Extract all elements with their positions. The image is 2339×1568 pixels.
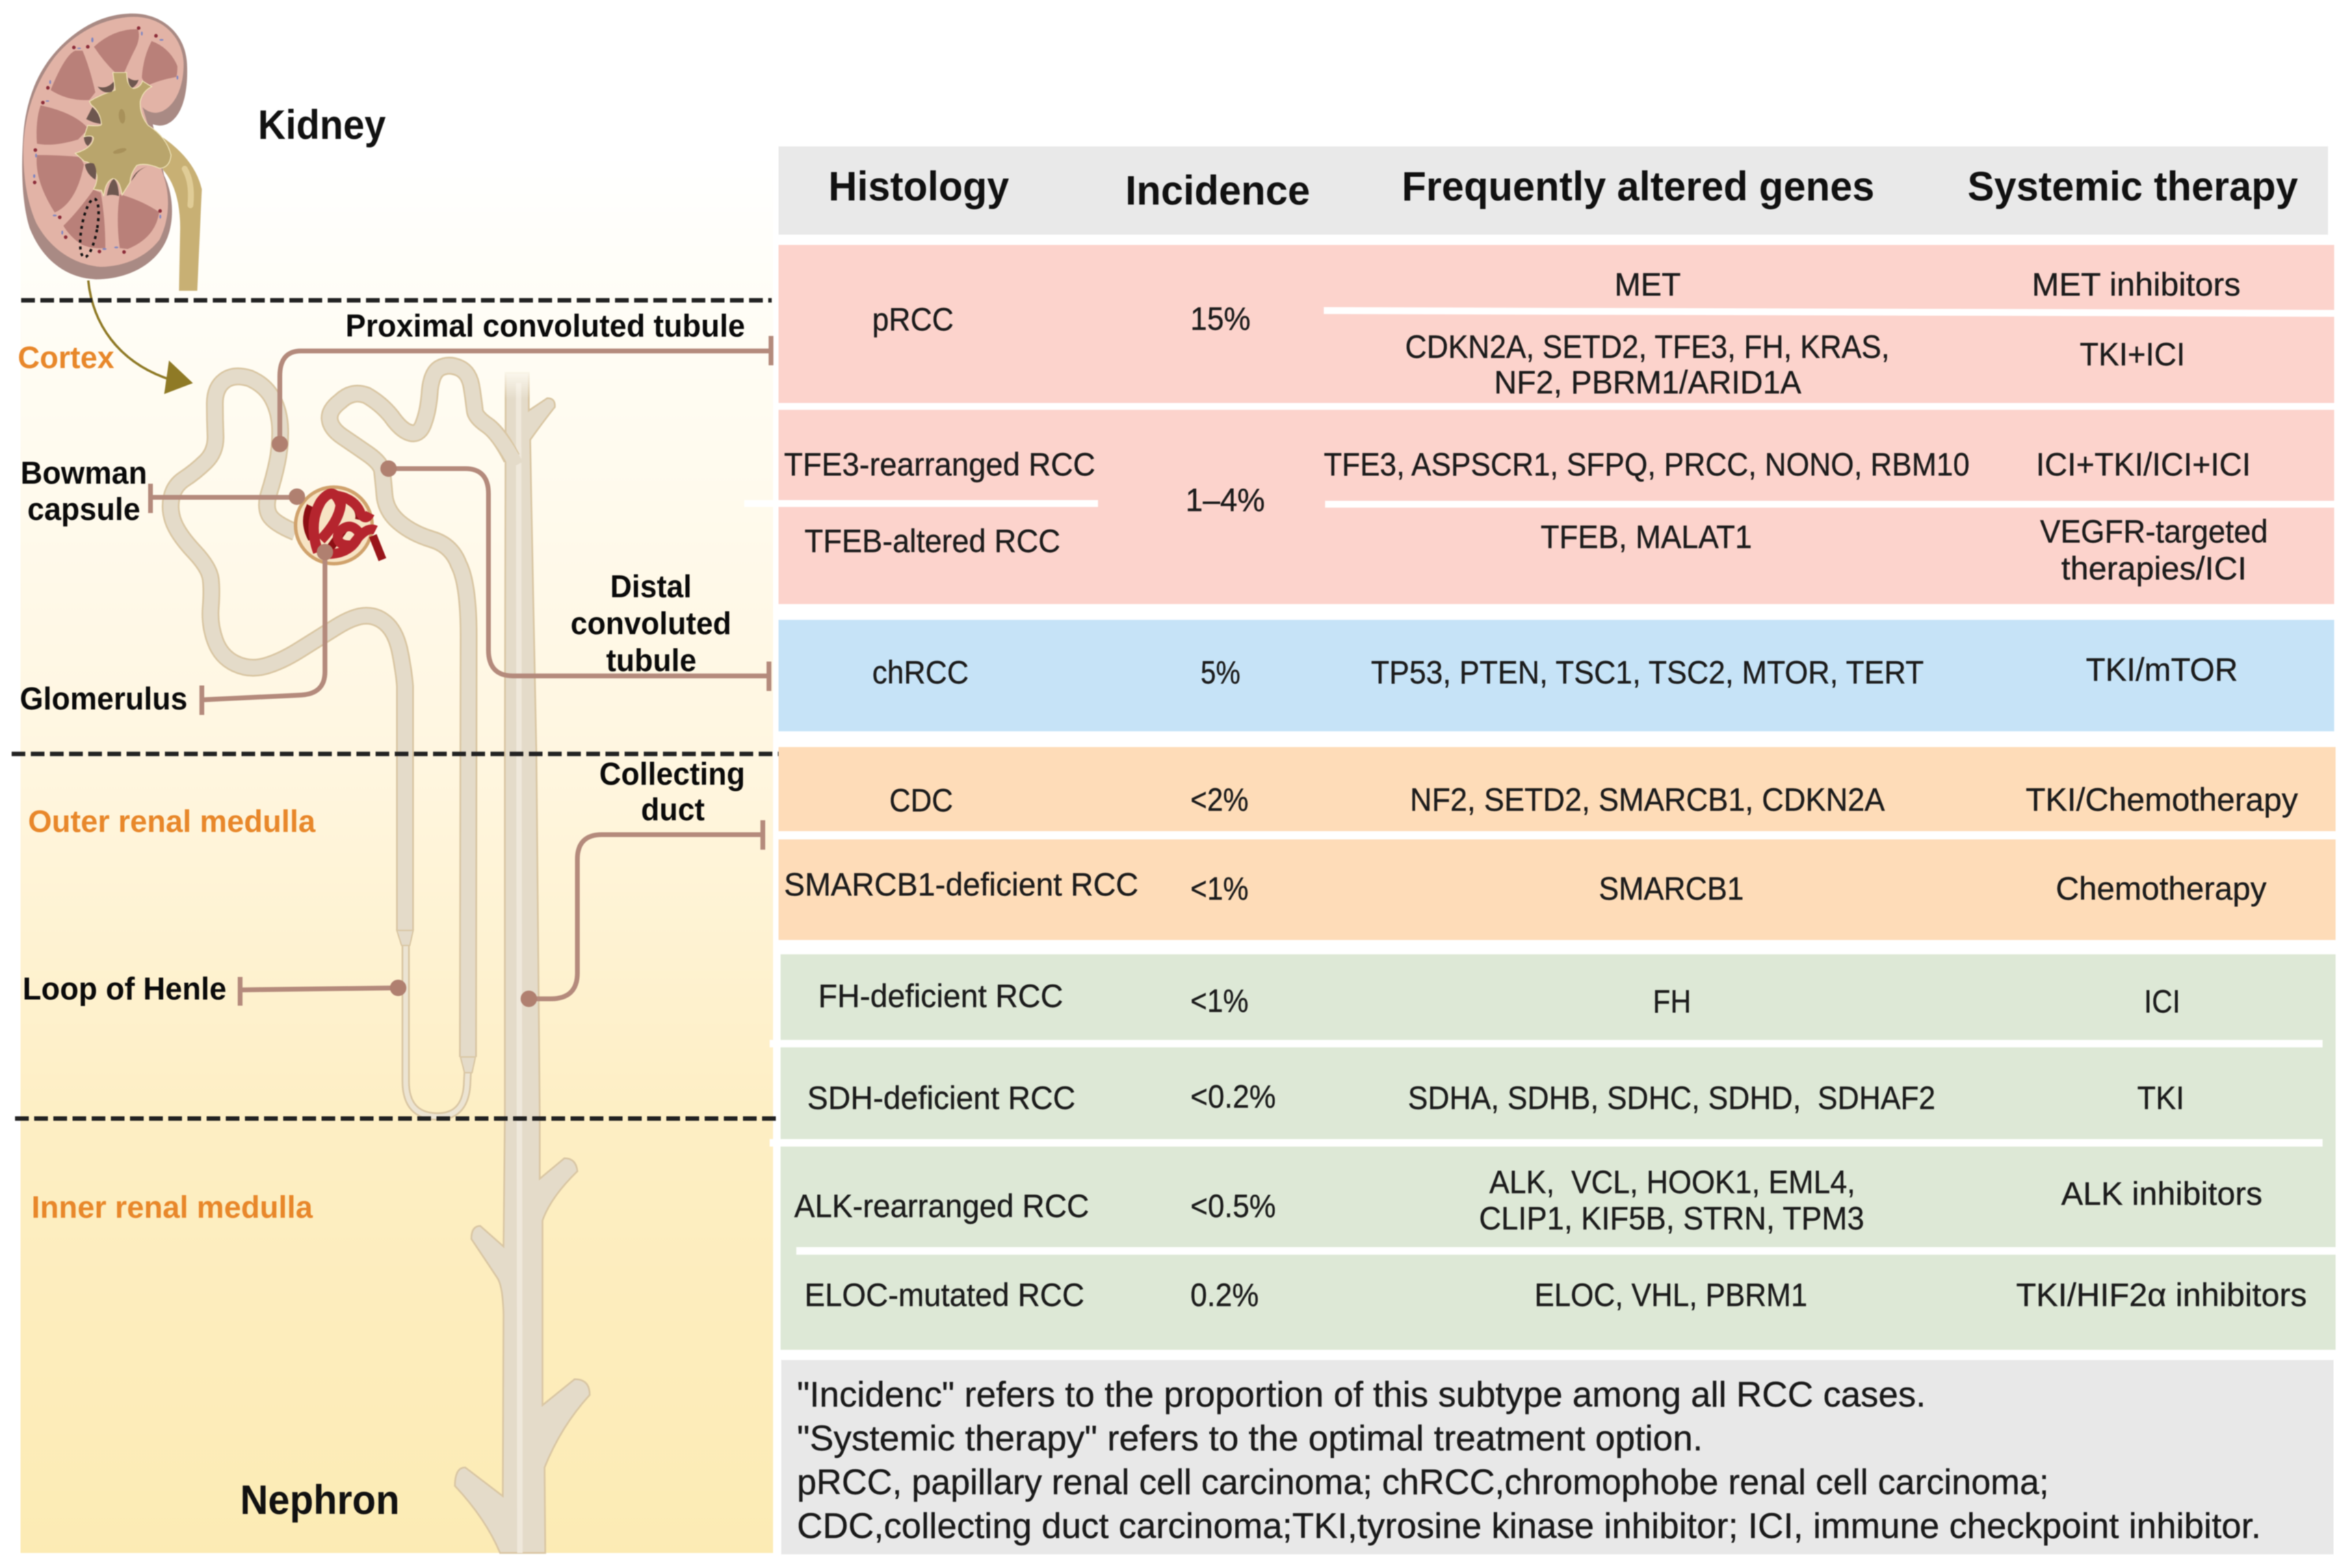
title: Nephron: Nephron xyxy=(240,1477,400,1523)
row: TFE3-rearranged RCC: ICI+TKI/ICI+ICI xyxy=(2036,446,2251,482)
label: cortex: Cortex xyxy=(18,340,114,375)
label: loop of Henle: Loop of Henle xyxy=(23,971,226,1006)
row: chRCC: chRCC xyxy=(872,654,969,690)
row: CDC: <2% xyxy=(1190,781,1249,818)
diagram: nephron xyxy=(170,365,590,1553)
labels: nephron structures and zones xyxy=(18,308,745,1523)
row: chRCC: TKI/mTOR xyxy=(2086,651,2238,688)
row: ELOC-mutated RCC: ELOC-mutated RCC xyxy=(805,1277,1084,1313)
icon: calyces xyxy=(84,77,149,196)
row: TFEB-altered RCC xyxy=(805,513,2268,586)
leader: glomerulus xyxy=(202,544,333,715)
label: collecting duct xyxy=(599,756,745,827)
row: chRCC: TP53, PTEN, TSC1, TSC2, MTOR, TERT xyxy=(1371,654,1924,690)
label: proximal convoluted tubule: Proximal convoluted tubule xyxy=(345,308,745,343)
row: SDH-deficient RCC: <0.2% xyxy=(1190,1078,1276,1114)
row: FH-deficient RCC: FH-deficient RCC xyxy=(818,978,1063,1014)
row: TFEB-altered RCC: therapies/ICI xyxy=(2061,550,2247,586)
label: distal convoluted tubule: convoluted xyxy=(571,605,731,641)
label: Bowman capsule: Bowman xyxy=(21,455,147,491)
row: TFE3-rearranged RCC: TFE3, ASPSCR1, SFPQ, PRCC, NONO, RBM10 xyxy=(1324,446,1970,482)
panel: nephron background xyxy=(21,147,773,1553)
icon: vessels dots xyxy=(33,26,179,254)
row: FH-deficient RCC xyxy=(818,978,2180,1019)
leader: distal convoluted tubule xyxy=(380,460,769,691)
row: ELOC-mutated RCC xyxy=(805,1277,2307,1313)
panel: footnote: CDC,collecting duct carcinoma;TKI,tyrosine kinase inhibitor; ICI, immune checkpoint inhibitor. xyxy=(797,1506,2261,1546)
icon: renal pelvis xyxy=(75,73,171,196)
panel: footnote xyxy=(781,1360,2334,1554)
header: Incidence: Incidence xyxy=(1125,168,1310,213)
row: ALK-rearranged RCC: <0.5% xyxy=(1190,1188,1276,1224)
row: TFEB-altered RCC: TFEB-altered RCC xyxy=(805,523,1060,559)
row: ELOC-mutated RCC: TKI/HIF2α inhibitors xyxy=(2016,1277,2307,1313)
row: pRCC: 15% xyxy=(1190,300,1251,337)
row: TFE3-rearranged RCC: TFE3-rearranged RCC xyxy=(784,446,1095,482)
label: distal convoluted tubule: tubule xyxy=(606,642,696,678)
row: pRCC: TKI+ICI xyxy=(2080,336,2185,372)
row: FH-deficient RCC: ICI xyxy=(2144,983,2180,1019)
label: collecting duct: Collecting xyxy=(599,756,745,792)
row: TFE3-rearranged RCC xyxy=(784,446,2251,482)
label: Bowman capsule: capsule xyxy=(27,491,140,527)
panel: blue row (chRCC) xyxy=(779,620,2334,731)
row: TFEB-altered RCC: TFEB, MALAT1 xyxy=(1541,519,1752,555)
header: Systemic therapy: Systemic therapy xyxy=(1968,164,2299,209)
row: chRCC xyxy=(872,651,2238,690)
row: SMARCB1-deficient RCC xyxy=(784,866,2266,906)
header: Histology: Histology xyxy=(828,164,1010,209)
row: SDH-deficient RCC xyxy=(807,1078,2184,1116)
distal tubule xyxy=(330,365,517,1073)
label: outer renal medulla: Outer renal medulla xyxy=(28,804,316,839)
row: pRCC: MET xyxy=(1615,266,1681,302)
row: chRCC: 5% xyxy=(1201,654,1240,690)
row: ALK-rearranged RCC: ALK, VCL, HOOK1, EML4, xyxy=(1489,1164,1855,1200)
label: Bowman capsule xyxy=(21,455,147,527)
row: ELOC-mutated RCC: 0.2% xyxy=(1190,1277,1259,1313)
row: SMARCB1-deficient RCC: <1% xyxy=(1190,870,1249,906)
leader: proximal convoluted tubule xyxy=(272,336,771,452)
cell: 1–4% incidence: 1–4% xyxy=(1186,482,1265,518)
proximal tubule and descending limb xyxy=(170,376,405,930)
row: SMARCB1-deficient RCC: SMARCB1 xyxy=(1599,870,1744,906)
header: Frequently altered genes: Frequently altered genes xyxy=(1402,164,1874,209)
row: CDC: TKI/Chemotherapy xyxy=(2026,781,2299,818)
row: CDC xyxy=(889,781,2299,818)
row: FH-deficient RCC: FH xyxy=(1653,983,1691,1019)
icon: renal pyramids xyxy=(36,29,177,249)
row: pRCC: NF2, PBRM1/ARID1A xyxy=(1494,364,1802,400)
label: distal convoluted tubule xyxy=(571,569,731,678)
row: pRCC: pRCC xyxy=(872,301,954,337)
row: ELOC-mutated RCC: ELOC, VHL, PBRM1 xyxy=(1534,1277,1807,1313)
label: collecting duct: duct xyxy=(641,792,705,827)
panel: footnote: pRCC, papillary renal cell carcinoma; chRCC,chromophobe renal cell carcinoma; xyxy=(797,1463,2049,1502)
arrow: kidney to nephron xyxy=(88,280,193,394)
panel: footnote: "Systemic therapy" refers to the optimal treatment option. xyxy=(797,1419,1703,1459)
row: SMARCB1-deficient RCC: Chemotherapy xyxy=(2056,870,2266,906)
label: distal convoluted tubule: Distal xyxy=(610,569,692,604)
row: ALK-rearranged RCC: ALK-rearranged RCC xyxy=(794,1188,1089,1224)
leader lines xyxy=(151,336,771,1007)
leader: Bowman capsule xyxy=(151,484,305,513)
row: CDC: NF2, SETD2, SMARCB1, CDKN2A xyxy=(1410,781,1885,818)
panel: green rows (FH, SDH, ALK, ELOC) xyxy=(770,954,2336,1350)
row: pRCC xyxy=(872,266,2240,400)
panel: pink rows (pRCC, TFE3, TFEB) xyxy=(744,245,2334,604)
thin loop of Henle xyxy=(397,930,468,1116)
row: SDH-deficient RCC: TKI xyxy=(2137,1080,2184,1116)
icon: ureter xyxy=(153,131,202,291)
glomerulus and Bowman capsule xyxy=(296,487,382,564)
label: glomerulus: Glomerulus xyxy=(20,681,187,716)
row: pRCC: CDKN2A, SETD2, TFE3, FH, KRAS, xyxy=(1405,328,1890,365)
row: pRCC: MET inhibitors xyxy=(2032,266,2240,302)
dashed zone boundaries xyxy=(12,300,784,1119)
collecting duct xyxy=(455,368,590,1553)
row: ALK-rearranged RCC: CLIP1, KIF5B, STRN, TPM3 xyxy=(1479,1200,1864,1236)
leader: loop of Henle xyxy=(240,977,406,1006)
row: ALK-rearranged RCC xyxy=(794,1164,2262,1236)
label: inner renal medulla: Inner renal medulla xyxy=(31,1190,313,1225)
row: ALK-rearranged RCC: ALK inhibitors xyxy=(2061,1175,2262,1212)
icon: dotted nephron outline xyxy=(77,198,102,259)
row: TFEB-altered RCC: VEGFR-targeted xyxy=(2040,513,2268,549)
panel: orange rows (CDC, SMARCB1) xyxy=(779,747,2336,940)
title: Kidney: Kidney xyxy=(258,102,387,148)
icon: kidney cross-section xyxy=(22,14,202,291)
table header xyxy=(779,146,2328,235)
leader: collecting duct xyxy=(521,820,763,1007)
row: CDC: CDC xyxy=(889,782,953,818)
row: SDH-deficient RCC: SDH-deficient RCC xyxy=(807,1080,1075,1116)
row: SDH-deficient RCC: SDHA, SDHB, SDHC, SDHD, SDHAF2 xyxy=(1408,1080,1935,1116)
row: FH-deficient RCC: <1% xyxy=(1190,982,1249,1019)
row: SMARCB1-deficient RCC: SMARCB1-deficient RCC xyxy=(784,866,1138,902)
panel: footnote: "Incidenc" refers to the proportion of this subtype among all RCC cases. xyxy=(797,1375,1926,1415)
